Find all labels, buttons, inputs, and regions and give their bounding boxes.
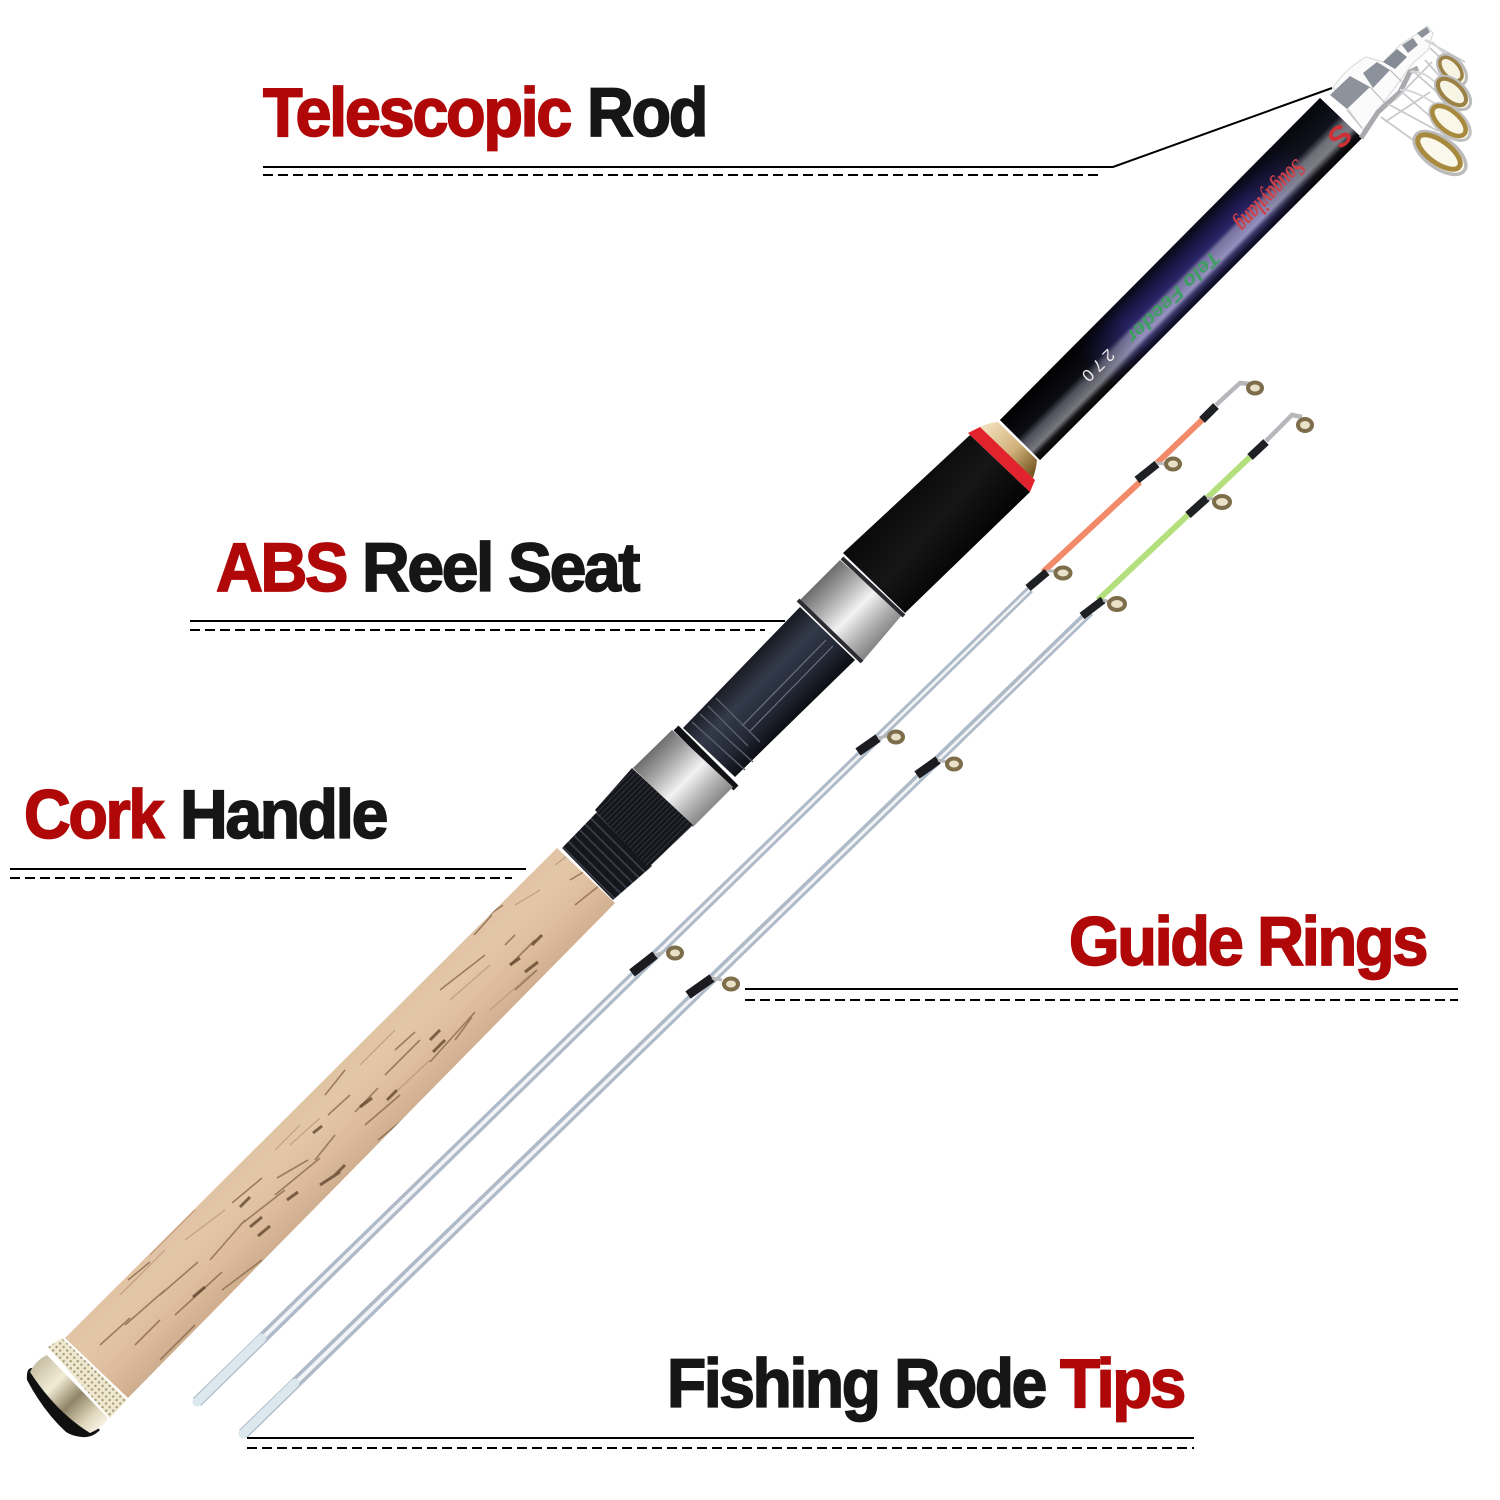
callout line: Cork Handle xyxy=(10,869,526,878)
blank logo: S xyxy=(1321,117,1358,155)
reel seat xyxy=(676,607,855,788)
callout line: Fishing Rode Tips xyxy=(247,1438,1194,1448)
top guide rings on the blank xyxy=(1361,40,1477,183)
heading: Telescopic Rod: Rod xyxy=(587,74,706,151)
fishing tip one (orange) xyxy=(193,382,1262,1406)
cork texture xyxy=(100,850,600,1360)
ring xyxy=(947,758,961,770)
foam grip rings xyxy=(968,422,1037,492)
guide ring 1 xyxy=(1432,49,1472,91)
heading: ABS Reel Seat xyxy=(216,529,640,606)
locking nut xyxy=(595,768,693,868)
heading: ABS Reel Seat: ABS xyxy=(216,529,346,606)
blank label: brand: Sougayilang xyxy=(1229,154,1311,237)
cork handle xyxy=(65,848,615,1398)
ring xyxy=(1248,382,1262,394)
butt cap xyxy=(27,1338,127,1437)
foam grip xyxy=(843,435,1030,613)
heading: Cork Handle xyxy=(24,776,387,853)
ring xyxy=(1056,568,1070,578)
heading: Fishing Rode Tips: Fishing Rode xyxy=(667,1345,1046,1422)
ring xyxy=(1109,598,1125,610)
callout line: ABS Reel Seat xyxy=(190,621,785,630)
heading: ABS Reel Seat: Reel Seat xyxy=(362,529,640,606)
heading: Guide Rings: Guide Rings xyxy=(1069,903,1426,980)
silver ring upper xyxy=(798,558,904,662)
telescopic sections at rod tip xyxy=(1330,26,1433,130)
callout line: Telescopic Rod xyxy=(263,88,1332,175)
heading: Cork Handle: Cork xyxy=(24,776,165,853)
heading: Telescopic Rod: Telescopic xyxy=(263,74,571,151)
guide ring 3 xyxy=(1423,97,1477,147)
blank label: Telo Feeder: Telo Feeder xyxy=(1120,246,1224,348)
ring xyxy=(1214,496,1230,508)
ring xyxy=(1298,419,1312,431)
silver ring lower xyxy=(633,730,733,827)
guide ring 4 xyxy=(1407,123,1473,183)
heading: Fishing Rode Tips: Tips xyxy=(1060,1345,1184,1422)
callout line: Guide Rings xyxy=(745,989,1458,1000)
ring xyxy=(668,948,682,958)
heading: Cork Handle: Handle xyxy=(180,776,387,853)
blank label: 270: 270 xyxy=(1078,345,1118,385)
threaded section xyxy=(562,812,652,900)
telescopic blank xyxy=(1000,98,1362,460)
guide ring 2 xyxy=(1429,70,1477,116)
ring xyxy=(724,978,738,990)
fishing tip two (green) xyxy=(239,415,1312,1438)
ring xyxy=(889,732,903,742)
ring xyxy=(1166,458,1180,470)
